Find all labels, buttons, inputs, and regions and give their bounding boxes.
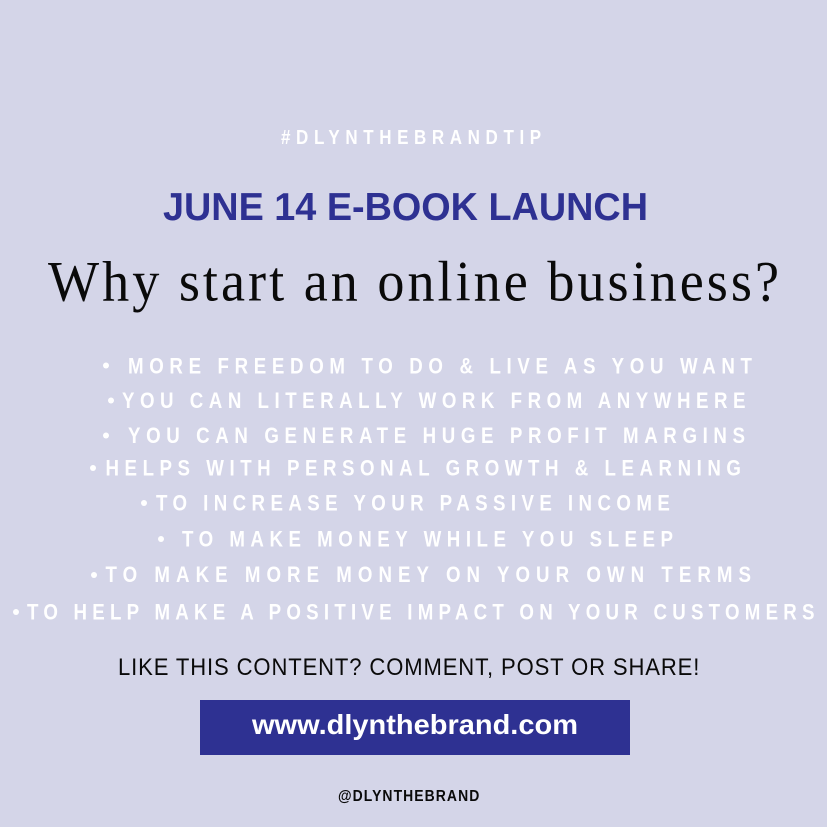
bullet list of reasons	[13, 355, 815, 625]
reason 4: HELPS WITH PERSONAL GROWTH & LEARNING	[106, 457, 741, 481]
website button: www.dlynthebrand.com	[251, 709, 578, 740]
reason 2: YOU CAN LITERALLY WORK FROM ANYWHERE	[122, 390, 745, 413]
heading: e-book launch: JUNE 14 E-BOOK LAUNCH	[163, 186, 648, 229]
reason 8: TO HELP MAKE A POSITIVE IMPACT ON YOUR CUSTOMERS	[27, 601, 815, 625]
title: Why start an online business?	[48, 250, 779, 314]
call to action text: LIKE THIS CONTENT? COMMENT, POST OR SHARE!	[118, 653, 699, 680]
hashtag heading: #DLYNTHEBRANDTIP	[281, 126, 541, 148]
website button	[200, 700, 630, 755]
reason 5: TO INCREASE YOUR PASSIVE INCOME	[156, 492, 670, 516]
reason 6: TO MAKE MONEY WHILE YOU SLEEP	[182, 528, 673, 552]
reason 3: YOU CAN GENERATE HUGE PROFIT MARGINS	[128, 425, 745, 448]
social handle: @DLYNTHEBRAND	[338, 788, 480, 805]
reason 1: MORE FREEDOM TO DO & LIVE AS YOU WANT	[128, 355, 752, 379]
reason 7: TO MAKE MORE MONEY ON YOUR OWN TERMS	[106, 564, 751, 587]
